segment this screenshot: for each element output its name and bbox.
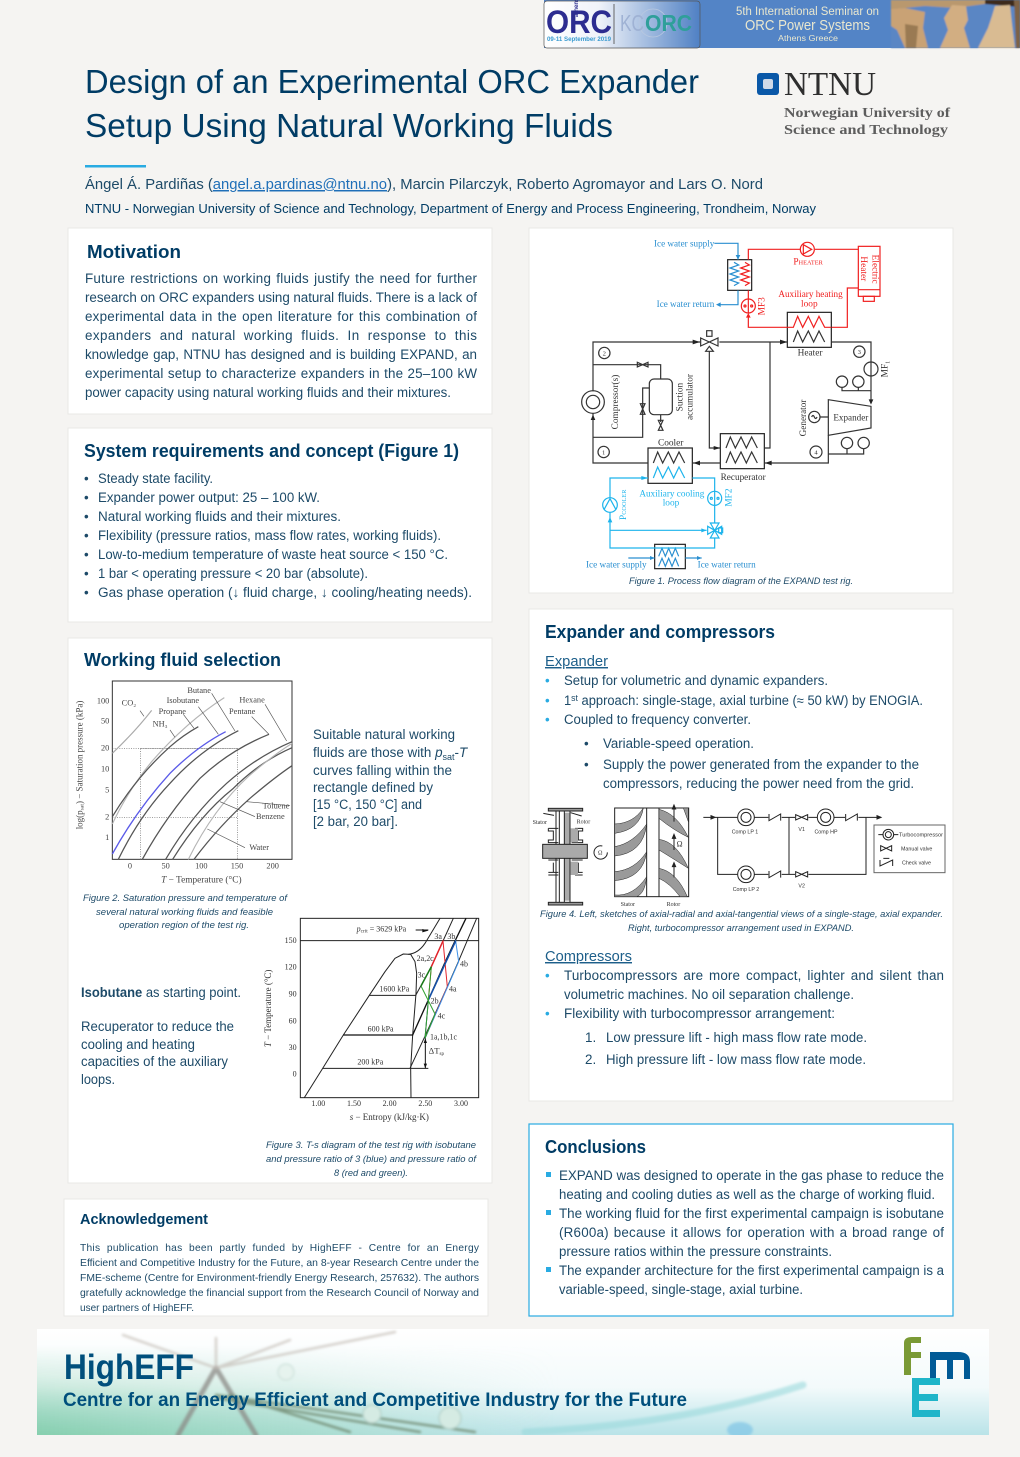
bullet list: conclusions: heating and cooling duties as well as the charge of working fluid.: [559, 1187, 935, 1202]
decorative dandelion stems: [123, 1332, 803, 1438]
chart: T-s diagram: 2.50: [418, 1099, 432, 1108]
labels: 3: [858, 349, 862, 356]
diagram: axial-radial expander sketch: Ω: [598, 850, 603, 856]
legend: [874, 825, 945, 873]
caption: figure 4: Right, turbocompressor arrangement used in EXPAND.: [628, 922, 854, 933]
chart: saturation pressure vs temperature: Benzene: [256, 812, 285, 821]
chart: T-s diagram: 0: [293, 1070, 297, 1079]
bullet list: compressors: [545, 968, 944, 1067]
curve: isobutane: [112, 732, 226, 854]
text: isobutane: Recuperator to reduce the: [81, 1019, 234, 1034]
chart: T-s diagram: 30: [289, 1043, 297, 1052]
bullet list: expander: approach: single-stage, axial turbine (≈ 50 kW) by ENOGIA.: [578, 693, 923, 708]
text block: acknowledgement: Efficient and Competitive Industry for the Future, an 8-year Research Centre under the: [80, 1258, 479, 1269]
caption: figure 4: Figure 4. Left, sketches of axial-radial and axial-tangential views of a single-stage, axial expander.: [540, 908, 943, 919]
diagram: turbocompressor arrangement: V1: [798, 827, 805, 833]
text block: motivation: expanders and natural working fluids. In response to this: [85, 328, 477, 343]
chart: saturation pressure vs temperature: 1: [105, 833, 109, 842]
cyan cooling loop: [603, 467, 723, 548]
bullet list: conclusions: [546, 1168, 945, 1297]
chart: saturation pressure vs temperature: T − Temperature (°C): [161, 874, 242, 885]
chart: saturation pressure vs temperature: 150: [231, 861, 243, 870]
text: suitable natural fluids: fluids are those with p: [313, 745, 443, 760]
seminar title: [736, 6, 879, 43]
heading: acknowledgement: Acknowledgement: [80, 1211, 208, 1228]
chart: saturation pressure vs temperature: sat: [79, 804, 85, 810]
text block: acknowledgement: gratefully acknowledge the financial support from the Research Council of Norway and: [80, 1288, 479, 1299]
text: suitable natural fluids: T: [459, 745, 468, 760]
chart: saturation pressure vs temperature: log(p: [74, 810, 84, 829]
panel: process flow figure: [529, 228, 953, 593]
text block: acknowledgement: This publication has been partly funded by HighEFF - Centre for an Energy: [80, 1243, 480, 1254]
chart: T-s diagram: 2.00: [383, 1099, 397, 1108]
labels: [586, 239, 890, 570]
bullet list: conclusions: pressure ratios within the pressure constraints.: [559, 1244, 832, 1259]
diagram: axial-radial expander sketch: Rotor: [577, 819, 590, 825]
logo: ORC Athens: 09-11 September 2019: [547, 37, 612, 43]
labels: PCOOLER: [619, 489, 629, 520]
panel: conclusions: [529, 1124, 953, 1316]
footer title: HighEFF: [64, 1348, 194, 1387]
title: [85, 64, 699, 145]
text block: motivation: experimental setup to characterize expanders in the 25–100 kW: [85, 366, 477, 381]
diagram: axial-tangential blade view: Ω: [677, 840, 683, 849]
title: Setup Using Natural Working Fluids: [85, 108, 613, 145]
bullet list: requirements: •: [84, 585, 89, 600]
bullet list: expander: Variable-speed operation.: [603, 736, 754, 751]
labels: Heater: [798, 349, 823, 359]
bullet list: conclusions: variable-speed, single-stage, axial turbine.: [559, 1282, 803, 1297]
text block: motivation: power capacity using natural working fluids and their mixtures.: [85, 385, 451, 400]
labels: MF2: [724, 488, 734, 507]
text: suitable natural fluids: rectangle defined by: [313, 780, 433, 795]
chart: saturation pressure vs temperature: 100: [195, 861, 208, 870]
text: suitable natural fluids: sat: [443, 752, 455, 762]
chart: T-s diagram: T − Temperature (°C): [263, 970, 273, 1047]
heading: working fluid selection: Working fluid selection: [84, 650, 281, 670]
bullet list: expander: •: [545, 693, 550, 708]
top conference banner: [544, 0, 1020, 48]
bullet list: requirements: •: [84, 490, 89, 505]
NTNU logo: Norwegian University of: [784, 106, 950, 121]
diagram: turbocompressor arrangement: Comp LP 2: [733, 887, 759, 893]
labels: Heater: [858, 256, 868, 282]
bullet list: compressors: 1.: [585, 1030, 596, 1045]
chart: T-s diagram: 4c: [438, 1012, 446, 1021]
diagram: turbocompressor arrangement: V2: [798, 884, 805, 890]
panel: system requirements: [68, 428, 492, 622]
red heating loop: [741, 242, 880, 327]
chart: saturation pressure vs temperature: 200: [266, 861, 279, 870]
chart: saturation pressure vs temperature: NH₃: [153, 720, 168, 729]
bullet list: compressors: volumetric machines. No oil separation challenge.: [564, 987, 854, 1002]
labels: Ice water return: [698, 560, 756, 570]
chart: T-s diagram: 1a,1b,1c: [430, 1033, 458, 1042]
chart: saturation pressure vs temperature: Isobutane: [167, 696, 199, 705]
photo: caryatids: [891, 0, 1020, 48]
heading: motivation: Motivation: [87, 242, 181, 262]
bullet list: requirements: •: [84, 566, 89, 581]
diagram: axial-tangential blade view: Rotor: [667, 902, 680, 908]
chart: saturation pressure vs temperature: 50: [101, 717, 109, 726]
caption: figure 2: Figure 2. Saturation pressure and temperature of: [83, 892, 288, 903]
bullet list: requirements: Flexibility (pressure ratios, mass flow rates, working fluids).: [98, 528, 441, 543]
text block: acknowledgement: [80, 1243, 480, 1314]
diagram: turbocompressor arrangement: Comp HP: [814, 830, 838, 836]
bullet list: expander: Setup for volumetric and dynamic expanders.: [564, 673, 828, 688]
bullet list: compressors: Low pressure lift - high mass flow rate mode.: [606, 1030, 867, 1045]
bullet list: expander: Supply the power generated from the expander to the: [603, 757, 919, 772]
logo: KCORC: KC: [620, 10, 644, 36]
caption: figure 2: several natural working fluids and feasible: [96, 906, 273, 917]
chart: T-s diagram: 1.50: [347, 1099, 361, 1108]
labels: MF₁: [880, 361, 890, 377]
logo: FME: [904, 1337, 970, 1417]
chart: T-s diagram: 60: [289, 1016, 297, 1025]
legend: Turbocompressor: [899, 832, 943, 838]
diagram: axial-radial expander sketch: [533, 808, 607, 905]
caption: figure 1: Figure 1. Process flow diagram of the EXPAND test rig.: [629, 575, 853, 586]
caption: figure 3: 8 (red and green).: [334, 1167, 408, 1178]
labels: Auxiliary heating: [778, 290, 843, 300]
labels: Ice water supply: [586, 560, 647, 570]
heading: expander and compressors: Expander and compressors: [545, 622, 775, 642]
text: isobutane: cooling and heating: [81, 1037, 195, 1052]
bullet list: expander: [545, 673, 923, 791]
chart: saturation pressure vs temperature: 20: [101, 744, 109, 753]
authors: Ángel Á. Pardiñas (angel.a.pardinas@ntnu.no), Marcin Pilarczyk, Roberto Agromayor and Lars O. Nord: [85, 176, 763, 193]
diagram: process flow: [582, 239, 890, 570]
text: suitable natural fluids: curves falling within the: [313, 763, 452, 778]
diagram: turbocompressor arrangement: Comp LP 1: [732, 830, 758, 836]
text block: motivation: experimental data in the open literature for this combination of: [85, 309, 477, 324]
chart: T-s diagram: 2a,2c: [417, 954, 434, 963]
caption: figure 2: [83, 892, 288, 930]
chart: T-s diagram: 600 kPa: [368, 1025, 394, 1034]
bullet list: requirements: Low-to-medium temperature of waste heat source < 150 °C.: [98, 547, 448, 562]
heat exchanger boxes: [648, 260, 831, 569]
labels: Suction: [676, 382, 686, 411]
chart: saturation pressure vs temperature: 2: [105, 813, 109, 822]
footer title: [64, 1354, 686, 1410]
chart: saturation pressure vs temperature: CO₂: [122, 699, 136, 708]
bullet list: compressors: High pressure lift - low mass flow rate mode.: [606, 1052, 866, 1067]
heading: system requirements: System requirements and concept (Figure 1): [84, 441, 459, 461]
diagram: axial-tangential blade view: [615, 805, 689, 908]
bullet list: conclusions: The expander architecture for the first experimental campaign is a: [559, 1263, 945, 1278]
bullet list: compressors: •: [545, 968, 550, 983]
chart: saturation pressure vs temperature: ) − Saturation pressure (kPa): [74, 701, 84, 804]
labels: Cooler: [658, 439, 684, 449]
NTNU logo: Science and Technology: [784, 123, 948, 138]
bullet list: requirements: 1 bar < operating pressure < 20 bar (absolute).: [98, 566, 368, 581]
bullet list: requirements: [84, 471, 472, 600]
labels: Electric: [870, 255, 880, 284]
text: suitable natural fluids: [15 °C, 150 °C] and: [313, 797, 422, 812]
logo: ORC Athens: ORC: [546, 4, 612, 40]
labels: 4: [814, 449, 818, 456]
logo: KCORC: [620, 9, 692, 37]
chart: T-s diagram: 90: [289, 990, 297, 999]
chart: saturation pressure vs temperature: 5: [105, 785, 109, 794]
labels: 2: [603, 350, 606, 357]
chart: saturation pressure vs temperature: Hexane: [239, 695, 265, 704]
chart: T-s diagram: = 3629 kPa: [368, 925, 407, 934]
bullet list: compressors: 2.: [585, 1052, 596, 1067]
bullet list: expander: •: [584, 757, 589, 772]
labels: PHEATER: [793, 258, 824, 268]
text: suitable natural fluids: Suitable natural working: [313, 727, 455, 742]
diagram: turbocompressor arrangement: [703, 809, 945, 893]
green cycle: [421, 967, 435, 1038]
text: suitable natural fluids: [2 bar, 20 bar].: [313, 814, 398, 829]
subheading: compressors: Compressors: [545, 949, 632, 965]
text: suitable natural fluids: [313, 727, 468, 829]
labels: accumulator: [686, 373, 696, 420]
subheading: expander: Expander: [545, 654, 608, 670]
chart: T-s diagram: 150: [285, 936, 297, 945]
text block: acknowledgement: user partners of HighEFF.: [80, 1303, 194, 1314]
chart: T-s diagram: 3.00: [454, 1099, 468, 1108]
panel: motivation: [68, 228, 492, 414]
labels: Recuperator: [721, 473, 767, 483]
panel: working fluid selection: [68, 638, 492, 1183]
text block: motivation: research on ORC expanders using natural fluids. There is a lack of: [85, 290, 477, 305]
blue cycle: [425, 941, 459, 1038]
chart: T-s diagram: 3c: [418, 971, 426, 980]
caption: figure 3: and pressure ratio of 3 (blue) and pressure ratio of: [266, 1153, 477, 1164]
bullet list: expander: compressors, reducing the power need from the grid.: [603, 776, 914, 791]
footer banner: HighEFF: [37, 1329, 989, 1438]
text: isobutane: Isobutane as starting point.: [81, 985, 241, 1000]
chart: saturation pressure vs temperature: 50: [162, 861, 170, 870]
bullet list: compressors: Flexibility with turbocompressor arrangement:: [564, 1006, 835, 1021]
diagram: axial-radial expander sketch: Stator: [533, 820, 547, 826]
chart: T-s diagram: 1.00: [311, 1099, 325, 1108]
seminar title: 5th International Seminar on: [736, 6, 879, 18]
bullet list: expander: •: [545, 673, 550, 688]
affiliation: NTNU - Norwegian University of Science and Technology, Department of Energy and Process Engineering, Trondheim, Norway: [85, 201, 817, 216]
chart: T-s diagram: 3b: [447, 932, 455, 941]
red cycle: [425, 941, 447, 1038]
caption: figure 4: [540, 908, 943, 933]
chart: saturation pressure vs temperature: Propane: [159, 707, 186, 716]
text: isobutane: loops.: [81, 1072, 115, 1087]
bullet list: requirements: •: [84, 547, 89, 562]
title: Design of an Experimental ORC Expander: [85, 64, 699, 101]
bullet list: compressors: Turbocompressors are more compact, lighter and silent than: [564, 968, 944, 983]
black main loop: [582, 331, 878, 463]
labels: 1: [602, 449, 605, 456]
diagram: axial-tangential blade view: Stator: [621, 902, 635, 908]
chart: T-s diagram: 1600 kPa: [379, 985, 410, 994]
bullet list: expander: 1: [564, 693, 571, 708]
labels: loop: [663, 498, 680, 508]
text block: motivation: [85, 271, 478, 400]
text block: motivation: Future restrictions on working fluids justify the need for further: [85, 271, 478, 286]
bullet list: requirements: Steady state facility.: [98, 471, 213, 486]
bullet list: expander: st: [571, 693, 578, 703]
text: isobutane: capacities of the auxiliary: [81, 1054, 228, 1069]
text block: acknowledgement: FME-scheme (Centre for Environment-friendly Energy Research, 257632). The authors: [80, 1273, 479, 1284]
bullet list: conclusions: EXPAND was designed to operate in the gas phase to reduce the: [559, 1168, 944, 1183]
bullet list: requirements: •: [84, 528, 89, 543]
chart: saturation pressure vs temperature: Pentane: [229, 707, 256, 716]
chart: T-s diagram: 200 kPa: [357, 1058, 384, 1067]
caption: figure 3: [266, 1139, 477, 1178]
chart: saturation pressure vs temperature: Toluene: [263, 801, 290, 810]
labels: Expander: [833, 414, 869, 424]
legend: Check valve: [902, 861, 931, 867]
chart: T-s diagram: 4b: [460, 960, 468, 969]
bullet list: requirements: Natural working fluids and their mixtures.: [98, 509, 341, 524]
chart: saturation pressure vs temperature: 0: [128, 861, 132, 870]
bullet list: requirements: •: [84, 471, 89, 486]
NTNU logo: NTNU: [784, 66, 876, 103]
seminar title: Athens Greece: [778, 33, 838, 43]
chart: T-s diagram: 120: [285, 963, 297, 972]
bullet list: conclusions: The working fluid for the first experimental campaign is isobutane: [559, 1206, 944, 1221]
chart: T-s diagram: 2b: [431, 996, 439, 1005]
labels: Ice water return: [657, 300, 715, 310]
NTNU logo: [757, 66, 950, 138]
caption: figure 2: operation region of the test rig.: [119, 919, 249, 930]
caption: figure 3: Figure 3. T-s diagram of the test rig with isobutane: [266, 1139, 476, 1150]
panel: acknowledgement: [64, 1199, 488, 1316]
bullet list: requirements: Expander power output: 25 – 100 kW.: [98, 490, 320, 505]
bullet list: expander: •: [545, 712, 550, 727]
chart: T-s diagram: 4a: [449, 984, 457, 993]
heading: conclusions: Conclusions: [545, 1137, 646, 1157]
bullet list: expander: Coupled to frequency converter.: [564, 712, 751, 727]
chart: T-s diagram: p: [356, 925, 361, 934]
chart: T-s diagram: s − Entropy (kJ/kg·K): [350, 1112, 429, 1122]
chart: T-s diagram: crit: [361, 929, 368, 935]
bullet list: requirements: Gas phase operation (↓ fluid charge, ↓ cooling/heating needs).: [98, 585, 472, 600]
bullet list: conclusions: (R600a) because it allows for operation with a broad range of: [559, 1225, 944, 1240]
text: suitable natural fluids: -: [455, 745, 459, 760]
blue ice water lines: [628, 243, 739, 566]
panel: expander and compressors: [529, 609, 953, 1101]
chart: T-s diagram: sp: [440, 1052, 444, 1057]
seminar title: ORC Power Systems: [745, 18, 870, 34]
chart: T-s diagram: 3a: [434, 932, 442, 941]
labels: Compressor(s): [610, 375, 621, 429]
chart: saturation pressure vs temperature: [74, 681, 292, 885]
labels: Generator: [799, 399, 809, 436]
footer title: Centre for an Energy Efficient and Competitive Industry for the Future: [63, 1390, 687, 1411]
logo: KCORC: ORC: [645, 10, 692, 36]
labels: MF3: [758, 297, 768, 315]
bullet list: compressors: •: [545, 1006, 550, 1021]
labels: Auxiliary cooling: [639, 489, 705, 499]
text block: motivation: knowledge gap, NTNU has designed and is building EXPAND, an: [85, 347, 477, 362]
labels: loop: [801, 299, 818, 309]
text: isobutane: [81, 985, 241, 1087]
chart: T-s diagram: [263, 918, 479, 1122]
chart: saturation pressure vs temperature: Butane: [187, 686, 211, 695]
labels: Ice water supply: [654, 239, 715, 249]
legend: Manual valve: [901, 846, 932, 852]
chart: T-s diagram: ΔT: [429, 1046, 440, 1056]
bullet list: expander: •: [584, 736, 589, 751]
chart: saturation pressure vs temperature: 10: [101, 764, 109, 773]
bullet list: requirements: •: [84, 509, 89, 524]
chart: saturation pressure vs temperature: 100: [97, 696, 109, 705]
chart: saturation pressure vs temperature: Water: [249, 843, 269, 852]
